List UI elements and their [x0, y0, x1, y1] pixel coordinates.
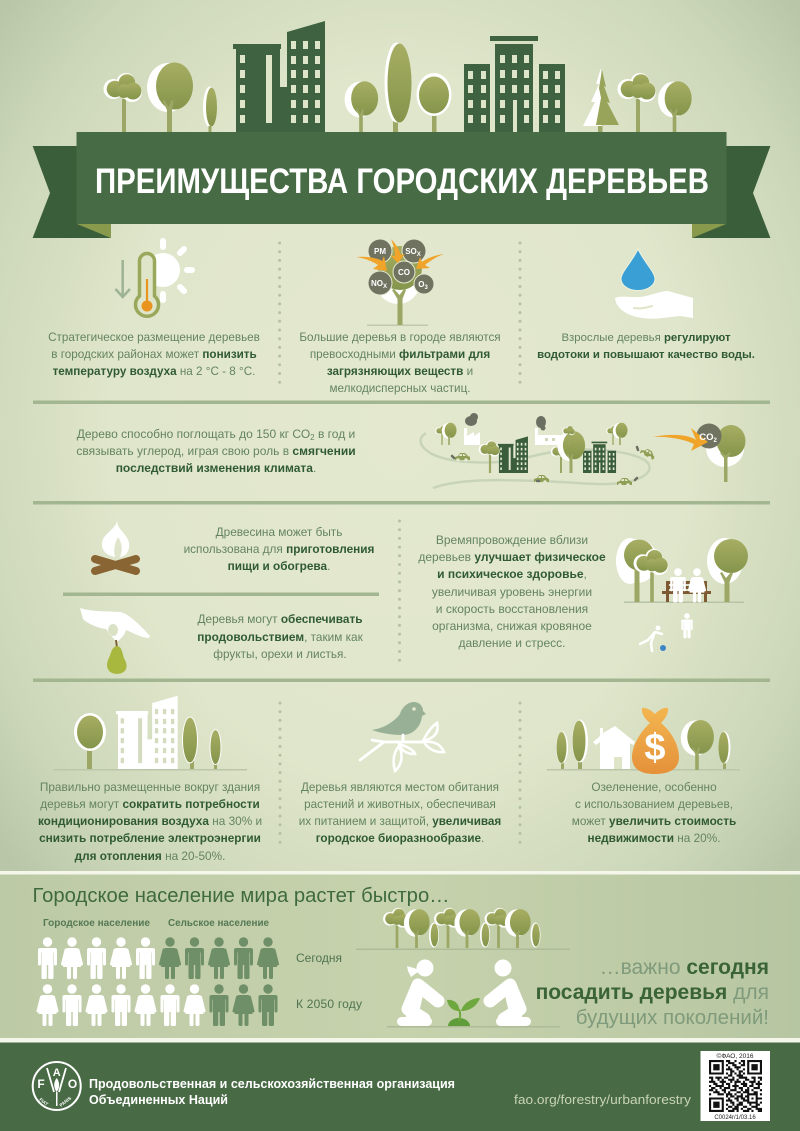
text: air filter: мелкодисперсных частиц. — [329, 382, 471, 395]
icon: tree absorbing CO2: CO — [699, 432, 713, 443]
icon: tree absorbing CO2: 2 — [713, 438, 717, 444]
icon: tree with pollutants: X — [383, 284, 387, 290]
header skyline illustration — [104, 21, 692, 132]
callout: …важно сегодня — [600, 956, 769, 979]
text: carbon: последствий изменения климата. — [116, 461, 316, 475]
text: air filter: Большие деревья в городе являются — [299, 331, 501, 344]
text: carbon: 2 — [310, 433, 315, 442]
QR code — [700, 1051, 770, 1121]
text: food: фрукты, орехи и листья. — [213, 647, 347, 661]
title ribbon — [33, 132, 770, 238]
panel: property value — [547, 708, 740, 845]
ribbon folds — [77, 224, 111, 238]
right person — [490, 960, 531, 1026]
cars — [455, 453, 470, 462]
tree cloud left — [104, 73, 142, 132]
text: health: и психическое здоровье, — [437, 567, 587, 581]
text: property value: с использованием деревьев, — [575, 797, 733, 811]
tree round right — [658, 81, 692, 132]
text: health: деревьев улучшает физическое — [418, 550, 606, 564]
text: biodiversity: растений и животных, обеспечивая — [304, 798, 496, 811]
website: fao.org/forestry/urbanforestry — [514, 1092, 692, 1107]
white rule above footer — [0, 1038, 800, 1042]
footer — [0, 1042, 800, 1131]
text: property value: недвижимости на 20%. — [587, 831, 721, 845]
icon: park scene — [616, 538, 748, 651]
factory left — [464, 413, 480, 445]
FAO logo: F — [37, 1077, 45, 1091]
icon: tree with pollutants: PM — [374, 247, 386, 256]
standing man — [681, 613, 693, 638]
pictogram: 2050 — [38, 984, 278, 1026]
text: property value: Озеленение, особенно — [591, 780, 717, 794]
illustration: two people planting sprout — [387, 960, 560, 1028]
text: air filter: превосходными фильтрами для — [310, 348, 490, 361]
text: health: Времяпровождение вблизи — [436, 533, 588, 547]
panel: health — [418, 533, 748, 651]
text: water: водотоки и повышают качество воды. — [537, 349, 755, 361]
text: energy: для отопления на 20-50%. — [75, 849, 225, 863]
text: biodiversity: их питанием и защитой, увеличивая — [299, 815, 501, 828]
panel: water — [537, 249, 755, 361]
icon: tree absorbing CO2 — [653, 424, 746, 482]
text: carbon: в год и — [315, 427, 355, 441]
text: food: Деревья могут обеспечивать — [198, 612, 362, 626]
buildings right — [464, 36, 565, 132]
pine tree — [583, 68, 619, 132]
FAO logo — [33, 1062, 81, 1110]
park tree left — [616, 538, 658, 602]
icon: bird on branch — [360, 702, 444, 771]
text: health: и скорость восстановления — [436, 602, 588, 616]
tree oval — [416, 73, 452, 132]
text: carbon: связывать углерод, играя свою роль в смягчении — [76, 444, 356, 458]
icon: tree with pollutants — [356, 239, 444, 326]
panel: fuel — [95, 520, 375, 573]
runner and ball — [640, 626, 666, 651]
label: 2050: К 2050 году — [296, 997, 362, 1011]
icon: water drop and hand — [615, 249, 693, 319]
tree round large — [147, 62, 193, 132]
FAO logo: FIAT — [38, 1097, 49, 1107]
icon: house, money bag and trees — [547, 708, 740, 774]
sprout — [447, 998, 480, 1026]
text: food: продовольствием, таким как — [197, 630, 363, 644]
icon: tree with pollutants: X — [417, 252, 421, 258]
panel: carbon — [76, 413, 746, 488]
FAO logo: A — [53, 1067, 61, 1079]
icon: house, money bag and trees: $ — [644, 727, 666, 769]
left person — [397, 960, 438, 1026]
label: today: Сегодня — [296, 951, 342, 965]
band heading: Городское население мира растет быстро… — [32, 885, 450, 907]
text: health: увеличивая уровень энергии — [432, 585, 592, 599]
tree round small — [345, 81, 378, 132]
text: health: давление и стресс. — [458, 636, 566, 650]
icon: thermometer and sun — [116, 241, 192, 316]
QR code: C0024r/1/03.16 — [714, 1115, 756, 1121]
icon: tree with pollutants: CO — [398, 268, 410, 277]
text: temperature: Стратегическое размещение деревьев — [48, 331, 260, 344]
tree tall oval — [384, 42, 412, 132]
bench — [662, 581, 711, 602]
organisation name: Продовольственная и сельскохозяйственная организация — [89, 1076, 455, 1091]
buildings left — [233, 21, 325, 132]
panel: food — [80, 608, 364, 674]
callout: посадить деревья для — [536, 981, 769, 1004]
icon: tree with pollutants: 3 — [424, 285, 428, 291]
park tree right — [707, 538, 748, 602]
icon: hand with pear — [80, 608, 150, 674]
panel: urban population — [0, 874, 800, 1038]
text: health: организма, снижая кровяное — [432, 619, 592, 633]
FAO logo: O — [68, 1077, 77, 1091]
text: water: Взрослые деревья регулируют — [561, 332, 731, 344]
text: air filter: загрязняющих веществ и — [327, 365, 473, 378]
label: rural: Сельское население — [168, 918, 269, 929]
trees row — [356, 908, 570, 950]
organisation name line 2: Объединенных Наций — [89, 1092, 228, 1107]
callout: будущих поколений! — [576, 1006, 769, 1029]
pictogram: today — [38, 937, 278, 979]
text: biodiversity: городское биоразнообразие. — [316, 832, 484, 845]
text: carbon: Дерево способно поглощать до 150 кг СО — [77, 427, 355, 442]
text: energy: кондиционирования воздуха на 30% и — [38, 814, 262, 828]
text: fuel: Древесина может быть — [216, 525, 342, 539]
small trees — [435, 426, 448, 445]
icon: tree with pollutants: O — [418, 280, 424, 289]
park tree cloud — [634, 549, 668, 602]
text: energy: снизить потребление электроэнергии — [39, 831, 261, 845]
icon: city map — [421, 413, 656, 488]
text: biodiversity: Деревья являются местом обитания — [301, 781, 499, 794]
panel: temperature — [48, 241, 260, 378]
tree narrow — [203, 86, 217, 132]
city buildings — [498, 436, 528, 473]
ribbon tails — [33, 146, 111, 238]
text: temperature: температуру воздуха на 2 °С - 8 °С. — [53, 365, 255, 378]
text: energy: Правильно размещенные вокруг здания — [40, 780, 260, 794]
icon: white building with trees — [53, 696, 247, 770]
label: urban: Городское население — [43, 918, 150, 929]
panel: energy — [38, 696, 262, 863]
road — [421, 433, 650, 488]
band background — [0, 874, 800, 1038]
ribbon panel — [76, 132, 726, 224]
footer background — [0, 1042, 800, 1131]
text: fuel: использована для приготовления — [184, 542, 374, 556]
QR code: ©ФАО, 2016 — [717, 1052, 754, 1060]
icon: tree with pollutants: SO — [405, 247, 417, 256]
white rule above band — [0, 871, 800, 874]
panel: biodiversity — [299, 702, 501, 845]
icon: tree with pollutants: NO — [371, 279, 383, 288]
tree cloud right — [618, 73, 656, 132]
text: property value: может увеличить стоимость — [572, 814, 736, 828]
seated people — [670, 568, 686, 602]
text: temperature: в городских районах может понизить — [51, 348, 257, 361]
FAO logo: PANIS — [59, 1096, 72, 1108]
text: energy: деревья могут сократить потребности — [40, 797, 260, 811]
panel: air filter — [299, 239, 501, 395]
icon: campfire — [95, 520, 136, 571]
text: fuel: пищи и обогрева. — [228, 559, 330, 573]
factory right — [535, 416, 563, 445]
